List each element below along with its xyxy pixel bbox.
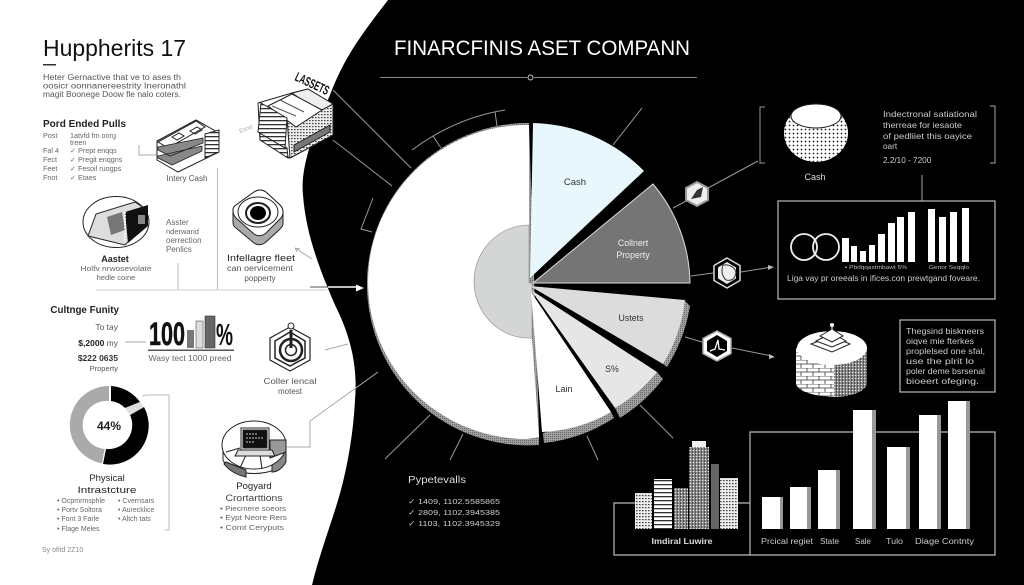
- text block: asster: oerrection: [166, 236, 202, 245]
- big number: 100% with skyline: Wasy tect 1000 preed: [148, 354, 232, 363]
- icon: server stack with label: [139, 120, 219, 183]
- text block: pord ended pulls: Fal 4: [43, 146, 59, 155]
- text block: pord ended pulls: Pord Ended Pulls: [43, 119, 126, 130]
- text block: pord ended pulls: treen: [70, 138, 86, 147]
- callout: text box: use the plrit lo: [906, 357, 975, 366]
- icon: hex ring: [233, 190, 283, 245]
- text block: culture funity: $222 0635: [78, 353, 118, 363]
- big number: 100% with skyline: 100: [149, 316, 185, 352]
- text block: pypetevalls: Pypetevalls: [408, 475, 466, 486]
- slice: five percent: [531, 290, 663, 418]
- panel: bar chart with rings: [778, 201, 995, 299]
- slice: loan: Lain: [555, 384, 573, 394]
- text block: aastet: [80, 254, 152, 282]
- callout: text box: proplelsed one sfal,: [906, 347, 985, 356]
- text block: culture funity: Cultnge Funity: [50, 305, 120, 316]
- text block: pogyard: Pogyard: [236, 481, 272, 492]
- pie chart: [367, 123, 690, 445]
- slice: large white with shadow band: [367, 123, 539, 445]
- text block: collateral: motest: [278, 387, 303, 396]
- text block: intro: magit Boonege Doow fle nalo coters.: [43, 90, 181, 99]
- connector lines around the pie: [333, 90, 772, 460]
- text block: physical infrastructure: • Ocpmrmsphle: [57, 498, 105, 505]
- label: small building note: Exnd: [239, 125, 254, 135]
- slice: collateral property: Collnert: [618, 238, 649, 248]
- slice: users: Ustets: [619, 313, 644, 323]
- text block: pypetevalls: ✓ 1409, 1102.5585865: [408, 497, 500, 506]
- callout: text box: Thegsind biskneers: [906, 327, 984, 336]
- donut chart: 44%: [70, 386, 149, 465]
- text block: physical infrastructure: • Altch tats: [118, 516, 151, 523]
- text block: pord ended pulls: Feet: [43, 164, 57, 173]
- icon: dotted sphere: Cash: [804, 172, 826, 182]
- text block: intro: oosicr oonnanereestrity Ineronathl: [43, 82, 186, 90]
- arrow: into the pie: [310, 284, 364, 292]
- panel: bar chart lower right: State: [820, 537, 840, 546]
- callout: text box: [900, 320, 995, 392]
- icon: hex target: [270, 323, 310, 371]
- callout: text box: oiqve mie fterkes: [906, 337, 974, 346]
- text block: physical infrastructure: • Font 3 Farle: [57, 516, 99, 523]
- text block: physical infrastructure: • Portv Soltora: [57, 507, 102, 514]
- text block: pord ended pulls: [43, 119, 126, 182]
- panel: bar chart with rings: Genor Seqqlo: [929, 265, 969, 271]
- text block: intelligent fleet: can oervicement: [227, 264, 294, 273]
- text block: physical infrastructure: Physical: [89, 473, 125, 484]
- text block: physical infrastructure: • Aurecklice: [118, 507, 154, 514]
- callout: text box: bioeert ofeging.: [906, 377, 979, 386]
- bars: [762, 401, 966, 529]
- text block: pord ended pulls: ✓ Fesoil ruogps: [70, 164, 122, 173]
- text block: cash description: of pedliiet this oayice: [883, 132, 973, 141]
- text block: pogyard: Crortarttions: [226, 493, 283, 504]
- panel: skyline box: Imdiral Luwire: [652, 537, 713, 546]
- icon: asset card circle: [83, 196, 149, 248]
- text block: pord ended pulls: ✓ Pregit enqgns: [70, 155, 123, 164]
- text block: physical infrastructure: [57, 473, 155, 533]
- slice: collateral property: Property: [616, 250, 650, 260]
- text block: culture funity: Property: [90, 364, 118, 373]
- icon: hex badge 1: [686, 182, 708, 206]
- text block: asster: [166, 218, 202, 254]
- slice: loan: [531, 292, 614, 443]
- text block: intelligent fleet: popperty: [244, 274, 276, 283]
- slice: collateral property: [533, 184, 690, 283]
- big number: 100% with skyline: [148, 316, 234, 363]
- text block: pogyard: • Piecmere soeors: [220, 504, 286, 513]
- text block: cash description: 2.2/10 - 7200: [883, 156, 932, 165]
- text block: culture funity: $,2000 my: [78, 338, 119, 348]
- arrowhead: to drum: [769, 354, 775, 359]
- panel: skyline box: [614, 441, 750, 555]
- slice: five percent: S%: [605, 364, 619, 374]
- arrow: fleet to pie: [295, 248, 312, 259]
- text block: pypetevalls: ✓ 2809, 1102.3945385: [408, 508, 500, 517]
- text block: collateral: Coller iencal: [264, 377, 317, 386]
- text block: pord ended pulls: Post: [43, 131, 57, 140]
- text block: culture funity: [50, 305, 120, 373]
- text block: physical infrastructure: Intrastcture: [78, 485, 136, 496]
- text block: pord ended pulls: ✓ Etaes: [70, 173, 97, 182]
- text block: pord ended pulls: Fect: [43, 155, 57, 164]
- slice: users: [530, 286, 690, 367]
- panel: bar chart lower right: Prcical regiet: [761, 537, 814, 546]
- text block: cash description: therreae for iesaote: [883, 121, 962, 130]
- icon: brick drum: [796, 323, 867, 397]
- callout: text box: poler deme bsrsenal: [906, 367, 985, 376]
- text block: pord ended pulls: ✓ Prept enqqs: [70, 146, 117, 155]
- slice: cash: [530, 123, 644, 278]
- text block: pypetevalls: [408, 475, 500, 528]
- text block: cash description: [883, 110, 977, 165]
- text block: cash description: Indectronal satiational: [883, 110, 977, 119]
- text block: pogyard: [220, 481, 287, 532]
- text block: pypetevalls: ✓ 1103, 1102.3945329: [408, 519, 500, 528]
- text block: aastet: hedle coine: [97, 273, 135, 282]
- arrowhead: to bar box: [768, 265, 774, 270]
- icon: laptop drum: [222, 421, 286, 477]
- icon: dotted sphere: [784, 104, 848, 182]
- text block: physical infrastructure: • Flage Meles: [57, 526, 100, 533]
- icon: server stack with label: Intery Cash: [167, 174, 207, 183]
- heading: left title: Huppherits 17: [43, 35, 186, 61]
- big number: 100% with skyline: %: [216, 317, 233, 352]
- panel: bar chart with rings: ▪ Pbdqqastmbawt 5%: [845, 265, 907, 271]
- text block: aastet: Holfv nrwosevolate: [80, 264, 152, 273]
- text block: intro: Heter Gernactive that ve to ases th: [43, 73, 181, 82]
- divider line: [178, 168, 218, 290]
- text block: pord ended pulls: Fnot: [43, 173, 57, 182]
- white left panel: [0, 0, 388, 585]
- icon: hex badge 3: [703, 331, 731, 361]
- bars: [842, 208, 969, 262]
- text block: intro: [43, 73, 186, 99]
- donut chart: 44%: 44%: [97, 419, 121, 433]
- panel: bar chart with rings: Liga vay pr oreeals in ifices.con prewtgand foveare.: [787, 274, 980, 283]
- text block: asster: Penlics: [166, 245, 192, 254]
- text block: cash description: oart: [883, 142, 898, 151]
- text block: physical infrastructure: • Cvernsars: [118, 498, 155, 505]
- text block: intelligent fleet: Infellagre fleet: [227, 253, 295, 264]
- icon: linked rings: [791, 234, 839, 260]
- text block: collateral: [264, 377, 317, 396]
- text block: asster: nderwarid: [166, 227, 199, 236]
- text block: aastet: Aastet: [101, 254, 129, 264]
- text block: culture funity: To tay: [95, 322, 119, 332]
- text block: intelligent fleet: [227, 253, 295, 283]
- text block: pogyard: • Comt Ceryputs: [220, 523, 284, 532]
- panel: bar chart lower right: [750, 401, 995, 555]
- icon: building block: [258, 89, 333, 158]
- text block: pogyard: • Eypt Neore Rers: [220, 513, 287, 522]
- slice: cash: Cash: [564, 177, 586, 188]
- text block: asster: Asster: [166, 218, 189, 227]
- panel: bar chart lower right: Tulo: [886, 537, 904, 546]
- connector: drum to pie: [287, 372, 378, 447]
- title: FINARCFINIS ASET COMPANN: [394, 37, 690, 60]
- panel: bar chart lower right: Sale: [855, 537, 872, 546]
- icon: hex badge 2: [714, 258, 740, 288]
- label: lassets: LASSETS: [293, 69, 332, 98]
- footer note: Sy ofitd 2Z10: [42, 547, 83, 554]
- text block: pord ended pulls: 1atvfd fm oorg: [70, 131, 116, 140]
- panel: bar chart lower right: Diage Contnty: [915, 537, 974, 546]
